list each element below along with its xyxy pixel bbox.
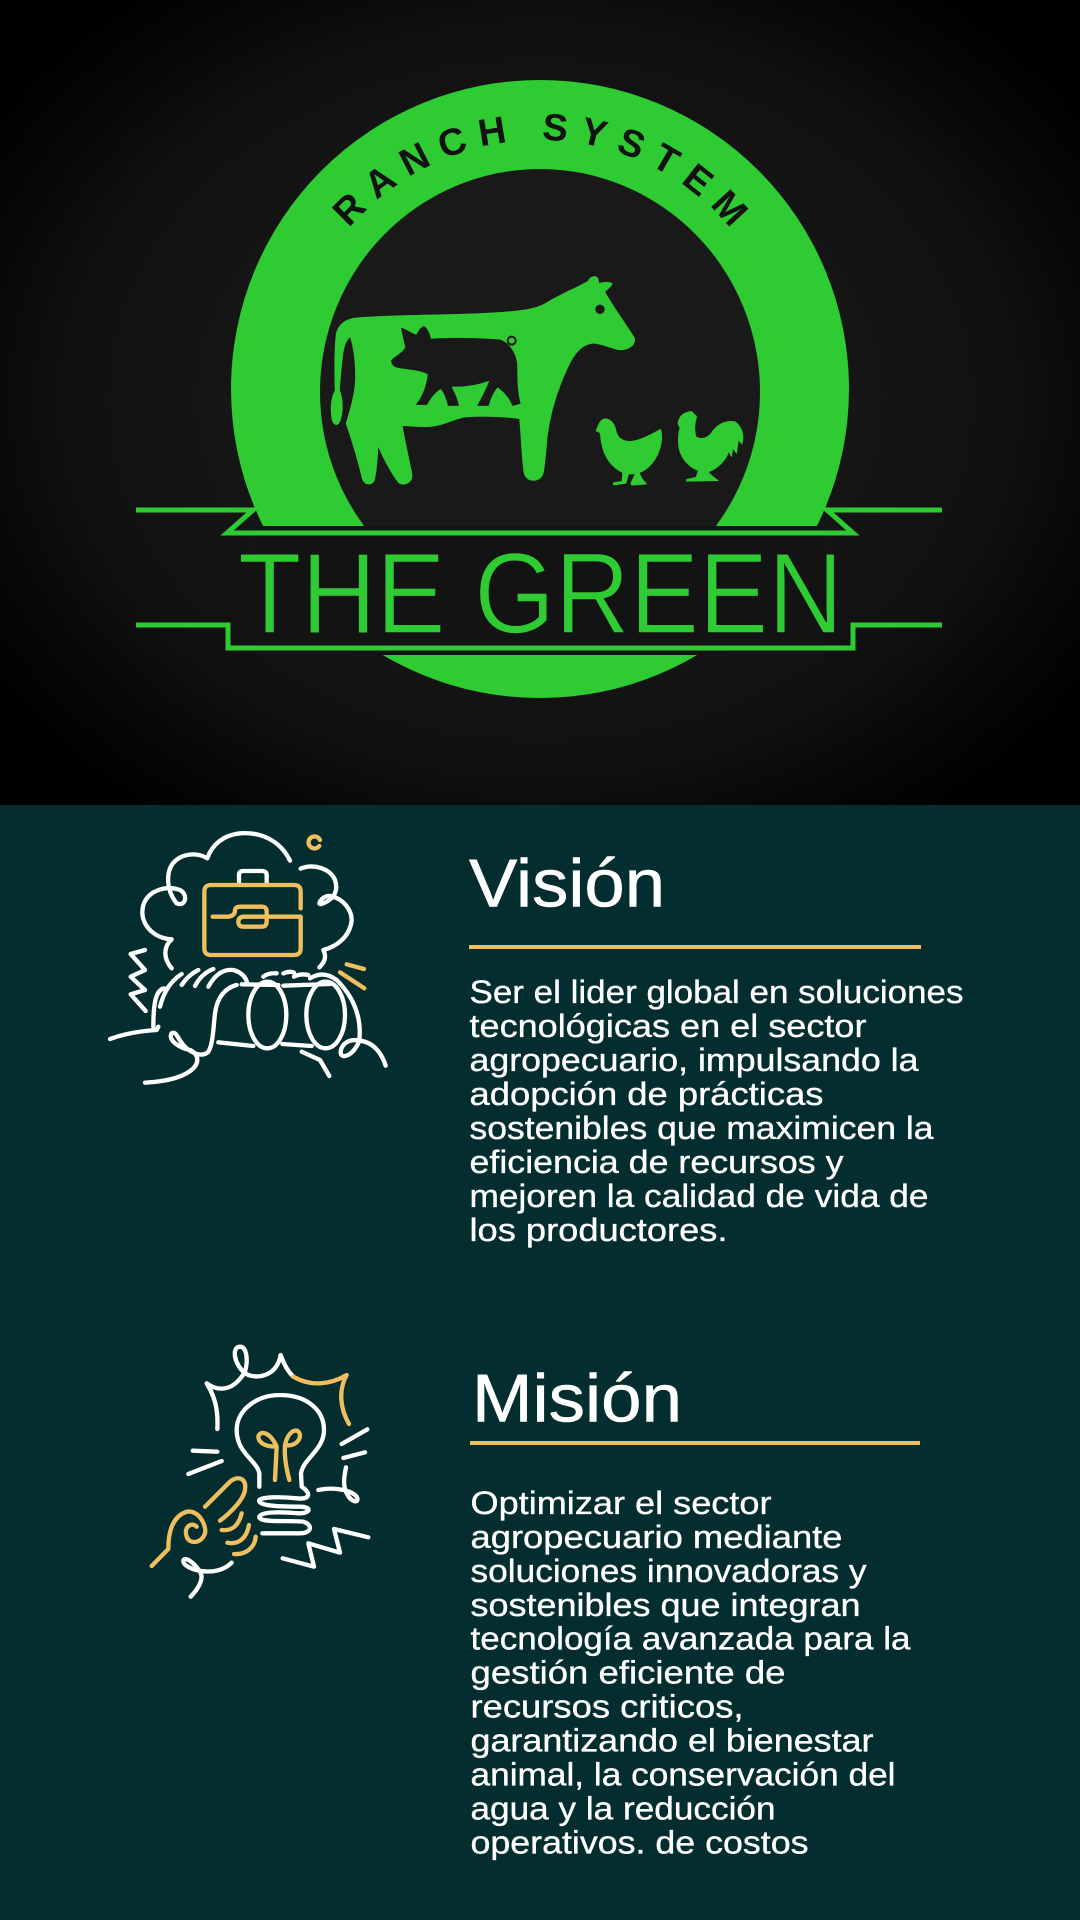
text block: vision: los productores. [470, 1212, 728, 1248]
text block: mission: tecnología avanzada para la [470, 1621, 911, 1657]
text block: mission: animal, la conservación del [470, 1756, 896, 1792]
banner ribbon: covers ring behind the name [136, 510, 942, 655]
text block: mission: garantizando el bienestar [470, 1723, 874, 1759]
panel: vision and mission [0, 805, 1080, 1920]
text block: vision: Ser el lider global en soluciones [470, 974, 964, 1010]
text block: mission: operativos. de costos [470, 1824, 808, 1860]
text block: mission: gestión eficiente de [470, 1655, 786, 1691]
logo: The Green Ranch System [136, 80, 942, 698]
text block: vision: eficiencia de recursos y [470, 1144, 844, 1180]
text block: vision: adopción de prácticas [470, 1076, 824, 1112]
icon: hands and briefcase dream [110, 833, 386, 1083]
icon: cow eye [595, 305, 605, 314]
green ring badge [231, 80, 849, 698]
text block: mission: sostenibles que integran [470, 1587, 860, 1623]
icon: cow [332, 277, 634, 484]
brand name: THE GREEN: THE GREEN [238, 530, 843, 658]
panel: logo header [0, 0, 1080, 805]
text block: vision: sostenibles que maximicen la [470, 1110, 934, 1146]
text block: vision: agropecuario, impulsando la [470, 1042, 919, 1078]
text block: vision: mejoren la calidad de vida de [470, 1178, 928, 1214]
icon: pig [392, 327, 520, 405]
curved text: RANCH SYSTEM: RANCH SYSTEM [332, 114, 748, 226]
divider: mission [470, 1441, 920, 1445]
icon: hen [596, 419, 662, 485]
animals: cow, pig and chickens [332, 277, 743, 485]
icon: rooster [678, 411, 743, 481]
text block: mission: agua y la reducción [470, 1790, 776, 1826]
heading: Misión: Misión [472, 1361, 682, 1437]
heading: Visión: Visión [469, 846, 665, 922]
icon: light bulb and hand [152, 1347, 368, 1597]
text block: mission: Optimizar el sector [470, 1485, 772, 1521]
text block: mission [470, 1485, 911, 1860]
text block: mission: recursos criticos, [470, 1689, 744, 1725]
text block: mission: agropecuario mediante [470, 1519, 842, 1555]
text block: vision: tecnológicas en el sector [470, 1008, 867, 1044]
text block: mission: soluciones innovadoras y [470, 1553, 866, 1589]
text block: vision [470, 974, 964, 1248]
divider: vision [469, 945, 921, 949]
